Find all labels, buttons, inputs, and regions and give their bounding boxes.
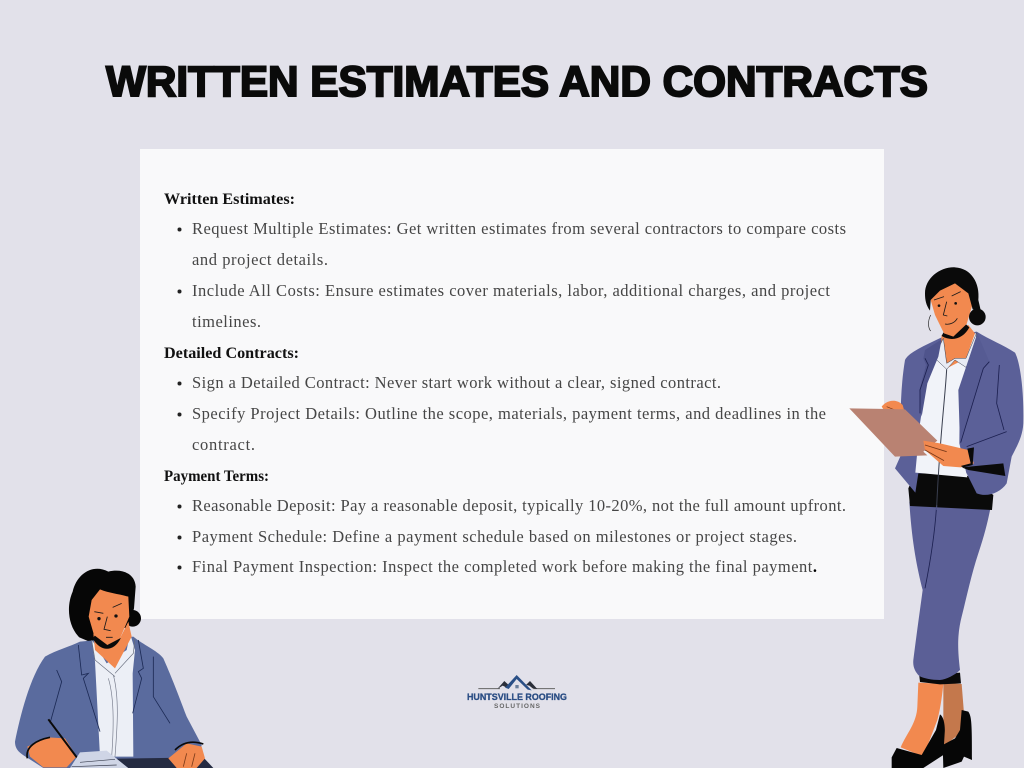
section: detailed contracts: Detailed Contracts: — [164, 345, 299, 362]
torso, head and clipboard — [849, 267, 1023, 510]
section: payment terms: Payment Terms: — [164, 468, 269, 485]
section: written estimates: Include All Costs: Ensure estimates cover materials, labor, additional charges, and project — [192, 281, 830, 300]
section: payment terms: Final Payment Inspection: Inspect the completed work before making the final payment. — [192, 557, 817, 576]
section: written estimates — [164, 191, 846, 331]
illustration: woman writing at desk — [15, 569, 213, 768]
section: written estimates: Request Multiple Estimates: Get written estimates from several contractors to compare costs — [192, 219, 846, 238]
logo: Huntsville Roofing Solutions: SOLUTIONS — [494, 703, 541, 710]
section: payment terms — [164, 468, 846, 576]
section: detailed contracts: Specify Project Details: Outline the scope, materials, payment terms, and deadlines in the — [192, 404, 826, 423]
title: WRITTEN ESTIMATES AND CONTRACTS — [106, 58, 928, 106]
legs and shoes — [892, 500, 992, 768]
section: detailed contracts: Sign a Detailed Contract: Never start work without a clear, signed contract. — [192, 373, 721, 392]
section: written estimates: Written Estimates: — [164, 191, 295, 208]
section: written estimates: timelines. — [192, 312, 261, 331]
section: payment terms: Payment Schedule: Define a payment schedule based on milestones or project stages. — [192, 527, 797, 546]
panel: text card — [140, 149, 884, 619]
illustration: woman with clipboard — [849, 267, 1023, 768]
logo: Huntsville Roofing Solutions — [467, 675, 567, 710]
section: detailed contracts — [164, 345, 826, 454]
section: detailed contracts: contract. — [192, 435, 255, 454]
logo: Huntsville Roofing Solutions: HUNTSVILLE ROOFING — [467, 692, 567, 703]
section: payment terms: Reasonable Deposit: Pay a reasonable deposit, typically 10-20%, not the full amount upfront. — [192, 496, 846, 515]
section: written estimates: and project details. — [192, 250, 328, 269]
